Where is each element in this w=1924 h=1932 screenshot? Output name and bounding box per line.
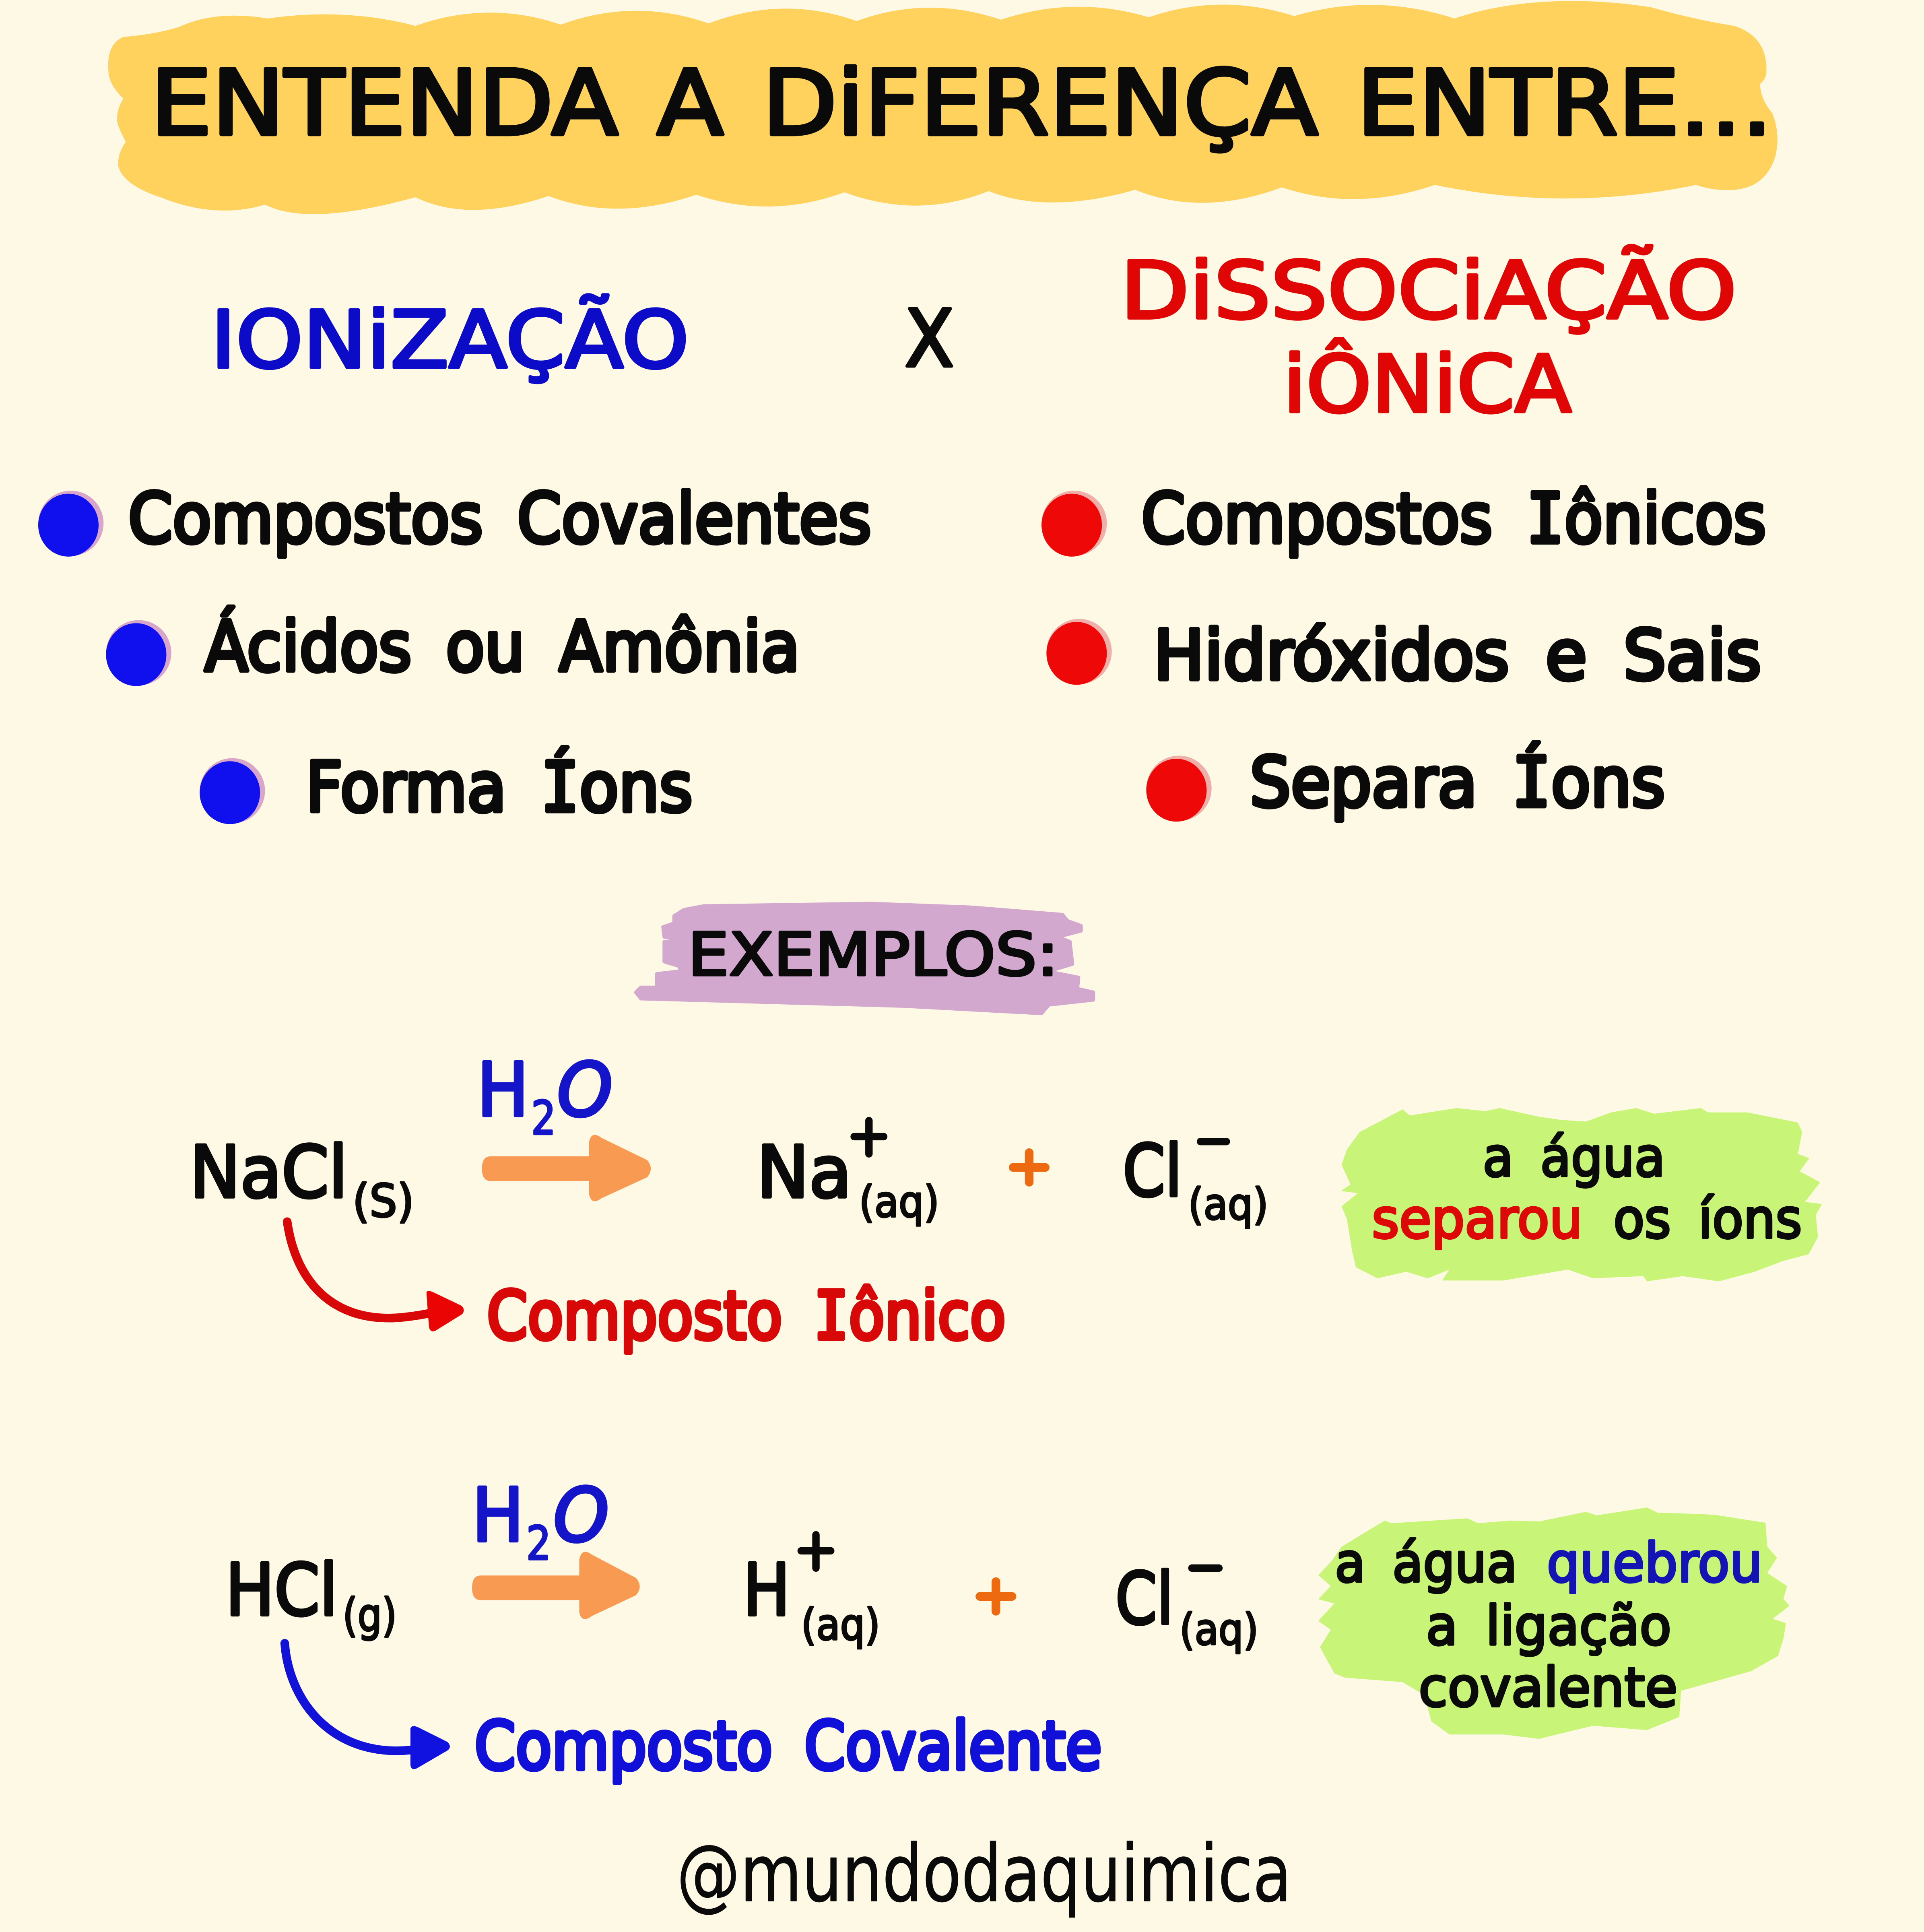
list: dissociação [1041,479,1766,823]
heading: dissociação iônica: iÔNiCA [1283,339,1571,431]
NaCl: NaCl [190,1131,348,1214]
heading: dissociação iônica [1120,245,1736,431]
bullet: ácidos [106,620,171,686]
text: separou: separou [1372,1187,1583,1251]
curved arrow blue [285,1643,417,1751]
H2O label [472,1472,609,1571]
callout: composto covalente [285,1643,1102,1785]
orange plus [980,1582,1012,1611]
charge plus [854,1121,884,1154]
HCl: HCl [225,1548,338,1632]
bullet: hidróxidos [1046,619,1112,685]
text: os íons: os íons [1613,1187,1802,1251]
list: ionização [38,479,871,828]
item: compostos iônicos: Compostos Iônicos [1141,479,1766,559]
H2O label: 2 [526,1516,551,1571]
state (s): (S) [353,1174,414,1228]
bullet: compostos covalentes [38,491,103,557]
heading: dissociação iônica: DiSSOCiAÇÃO [1120,245,1736,337]
charge minus [1192,1567,1219,1569]
state (aq): (aq) [1188,1180,1268,1230]
charge plus [801,1535,831,1568]
bullet: forma íons [200,758,265,824]
item: ácidos ou amônia: Ácidos ou Amônia [204,607,800,687]
examples heading [636,904,1093,1013]
H2O label: 2 [531,1091,556,1146]
item: compostos covalentes: Compostos Covalentes [128,479,871,559]
state (aq): (aq) [859,1177,939,1227]
state (g): (g) [342,1589,397,1642]
example 2: HCl equation [225,1472,1258,1655]
Cl: Cl [1116,1557,1173,1641]
title banner [108,1,1778,214]
H2O label: H [477,1047,529,1133]
green note 2 [1318,1507,1790,1739]
text: a ligação: a ligação [1426,1594,1671,1657]
bullet: separa íons [1146,755,1212,822]
item: hidróxidos e sais: Hidróxidos e Sais [1154,616,1761,696]
callout: composto iônico [287,1222,1006,1355]
purple brush [636,904,1093,1013]
H: H [743,1548,790,1632]
H2O label: H [472,1472,524,1558]
green brush [1318,1507,1790,1739]
bullet: compostos iônicos [1041,491,1107,557]
text: covalente: covalente [1419,1656,1677,1719]
heading: ionização: IONiZAÇÃO [211,295,689,386]
green brush [1341,1108,1822,1282]
text: Composto Covalente [474,1707,1102,1785]
curved arrow red [287,1222,431,1318]
orange plus [1013,1153,1045,1182]
H2O label: O [553,1472,609,1558]
state (aq): (aq) [801,1600,880,1650]
item: separa íons: Separa Íons [1250,742,1665,823]
H2O label [477,1047,612,1146]
Cl: Cl [1123,1129,1182,1213]
charge minus [1200,1140,1226,1143]
arrow: reaction [482,1135,651,1201]
text: Composto Iônico [487,1277,1006,1355]
item: forma íons: Forma Íons [306,747,693,828]
text: quebrou: quebrou [1547,1532,1763,1595]
footer handle: @mundodaquimica [676,1828,1292,1920]
arrow: reaction [472,1552,640,1619]
H2O label: O [557,1047,612,1133]
text: a água: a água [1335,1532,1517,1595]
exemplos label: EXEMPLOS: [688,921,1059,989]
text: a água: a água [1483,1126,1665,1189]
state (aq): (aq) [1180,1605,1258,1655]
green note 1 [1341,1108,1822,1282]
title text: ENTENDA A DiFERENÇA ENTRE... [151,51,1772,156]
Na: Na [757,1131,852,1214]
versus mark: X [905,293,954,385]
example 1: NaCl equation [190,1047,1268,1230]
